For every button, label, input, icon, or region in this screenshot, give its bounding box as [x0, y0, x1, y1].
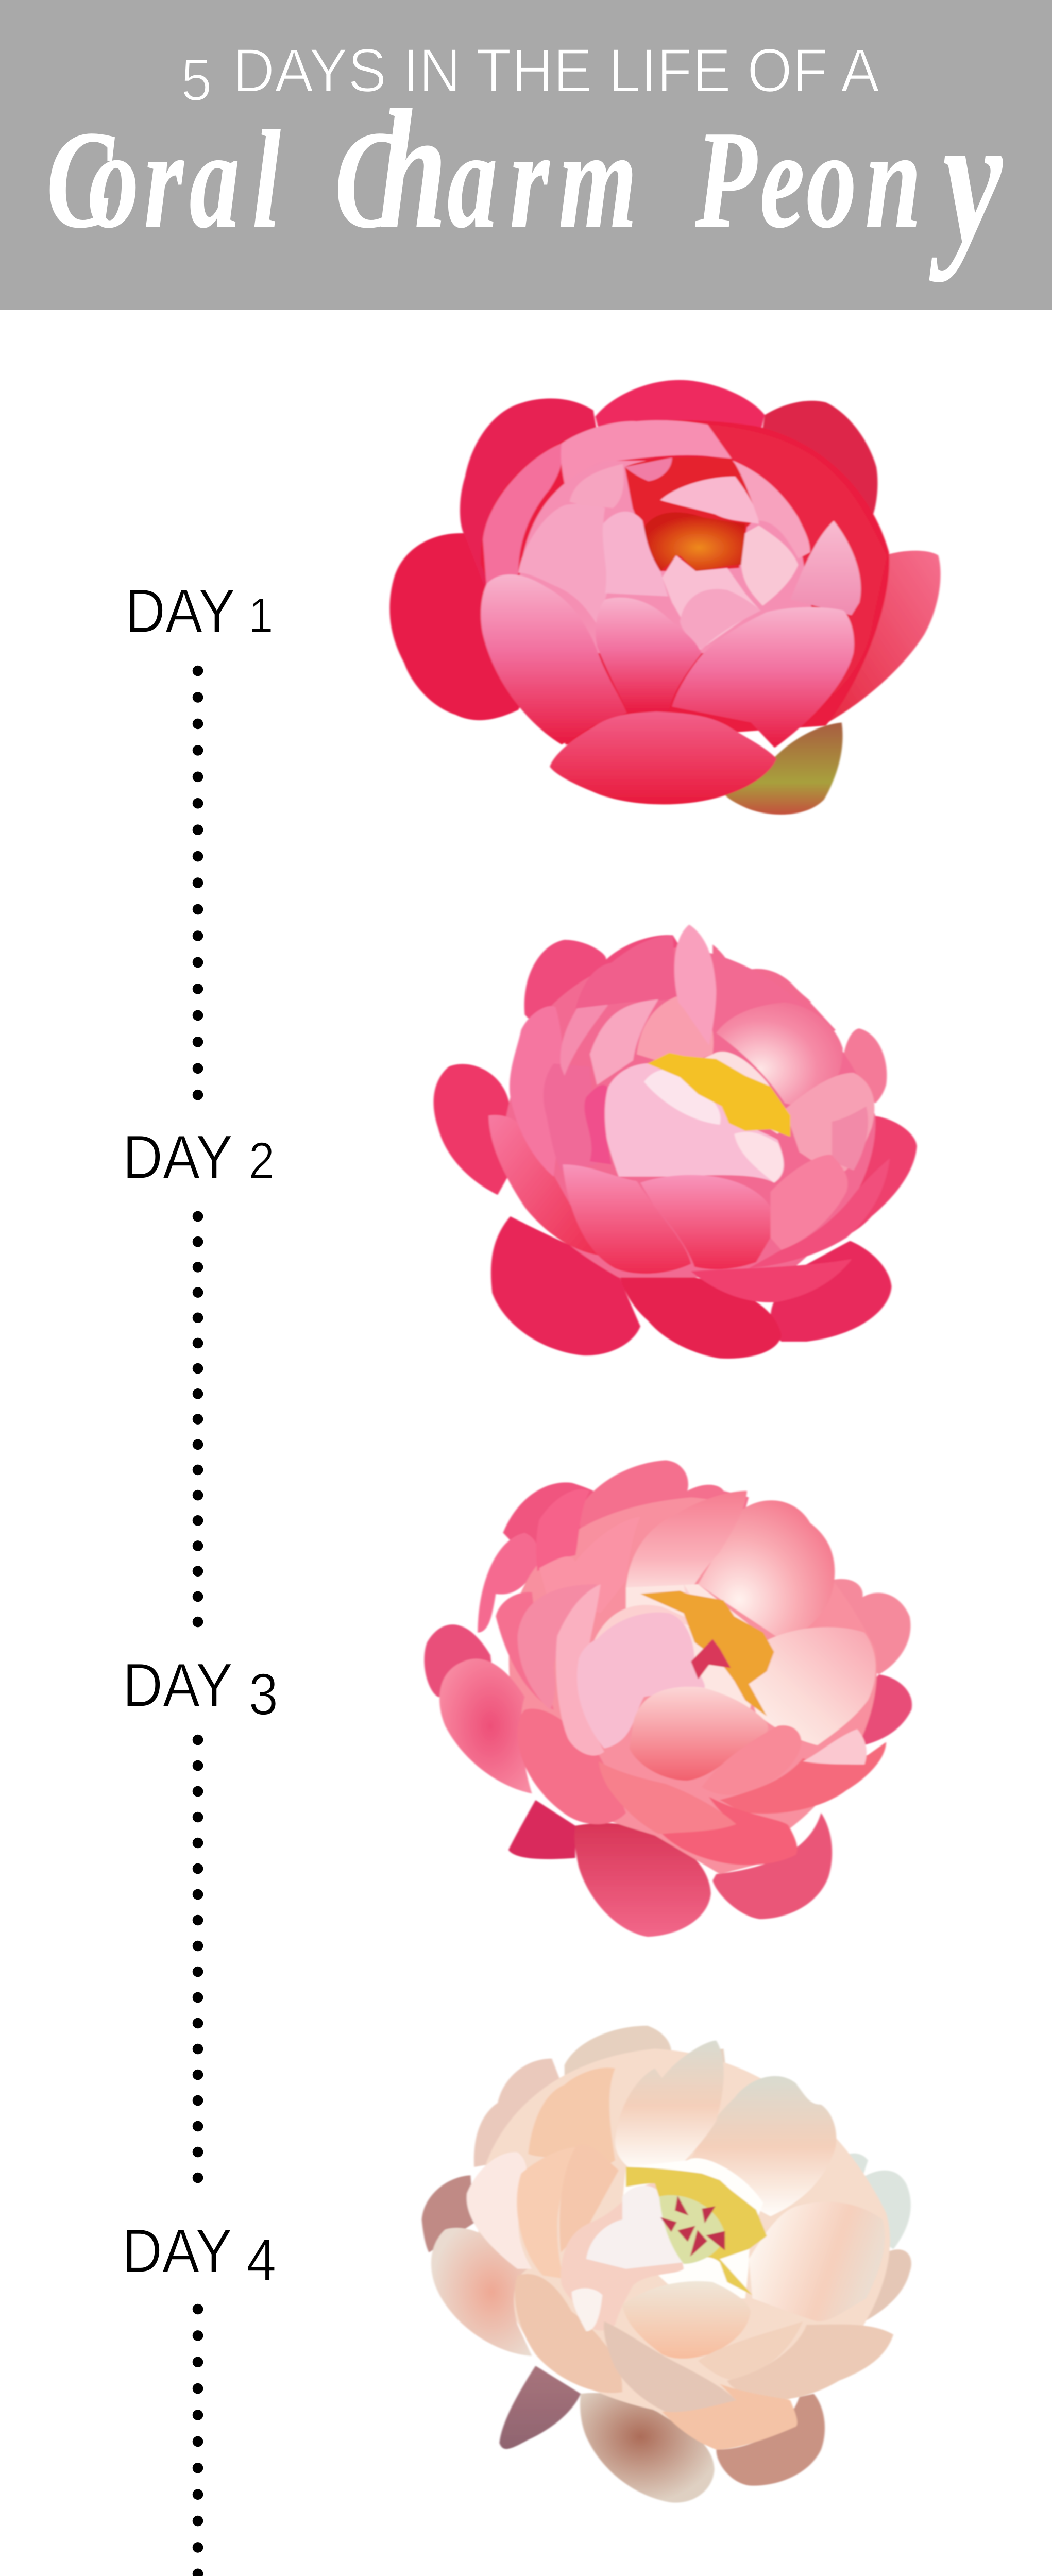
upper petals — [431, 2041, 885, 2393]
lower petals — [604, 2281, 893, 2450]
title: Coral — [47, 102, 281, 257]
title: Peon — [695, 102, 921, 257]
subtitle: 5 — [181, 46, 212, 113]
label: day 3: DAY — [123, 1651, 232, 1720]
timeline dots: day 3 to day 4 — [193, 1740, 203, 2178]
lower petals — [599, 1687, 886, 1865]
timeline dots: day 2 to day 3 — [193, 1216, 203, 1622]
upper petals — [496, 1489, 876, 1824]
timeline dots: day 1 to day 2 — [193, 671, 203, 1095]
label: day 4: 4 — [246, 2227, 276, 2293]
inner petals — [483, 420, 887, 694]
peony: day 3 open coral — [424, 1460, 912, 1937]
label: day 2: 2 — [249, 1132, 275, 1190]
outer petals — [389, 380, 941, 815]
subtitle: DAYS IN THE LIFE OF A — [233, 36, 879, 105]
title — [47, 75, 1004, 282]
label: day 2: DAY — [123, 1123, 232, 1192]
pale inner ruffle — [584, 1063, 784, 1183]
peony: day 2 opening — [434, 924, 917, 1359]
label: day 1: DAY — [125, 577, 234, 646]
centre ruffle — [556, 1584, 712, 1756]
centre ruffle — [561, 2183, 684, 2331]
stamens — [640, 1591, 774, 1716]
title: Charm — [335, 75, 637, 263]
title: y — [928, 76, 1004, 282]
label: day 3: 3 — [249, 1662, 278, 1727]
front petals — [481, 574, 854, 804]
peony: day 4 fading blush — [422, 2026, 911, 2503]
outer petals — [424, 1460, 912, 1937]
carpels — [691, 1639, 731, 1679]
body petals — [488, 924, 874, 1256]
outer petals — [434, 935, 917, 1359]
timeline dots: day 4 to day 5 — [193, 2309, 203, 2576]
outer petals — [422, 2026, 911, 2503]
lower front petals — [563, 1155, 890, 1274]
peony: day 1 bud — [389, 380, 941, 815]
label: day 4: DAY — [122, 2217, 231, 2285]
stamens — [648, 1053, 790, 1137]
stamens — [626, 2167, 767, 2295]
label: day 1: 1 — [248, 588, 273, 643]
header banner — [0, 0, 1052, 310]
